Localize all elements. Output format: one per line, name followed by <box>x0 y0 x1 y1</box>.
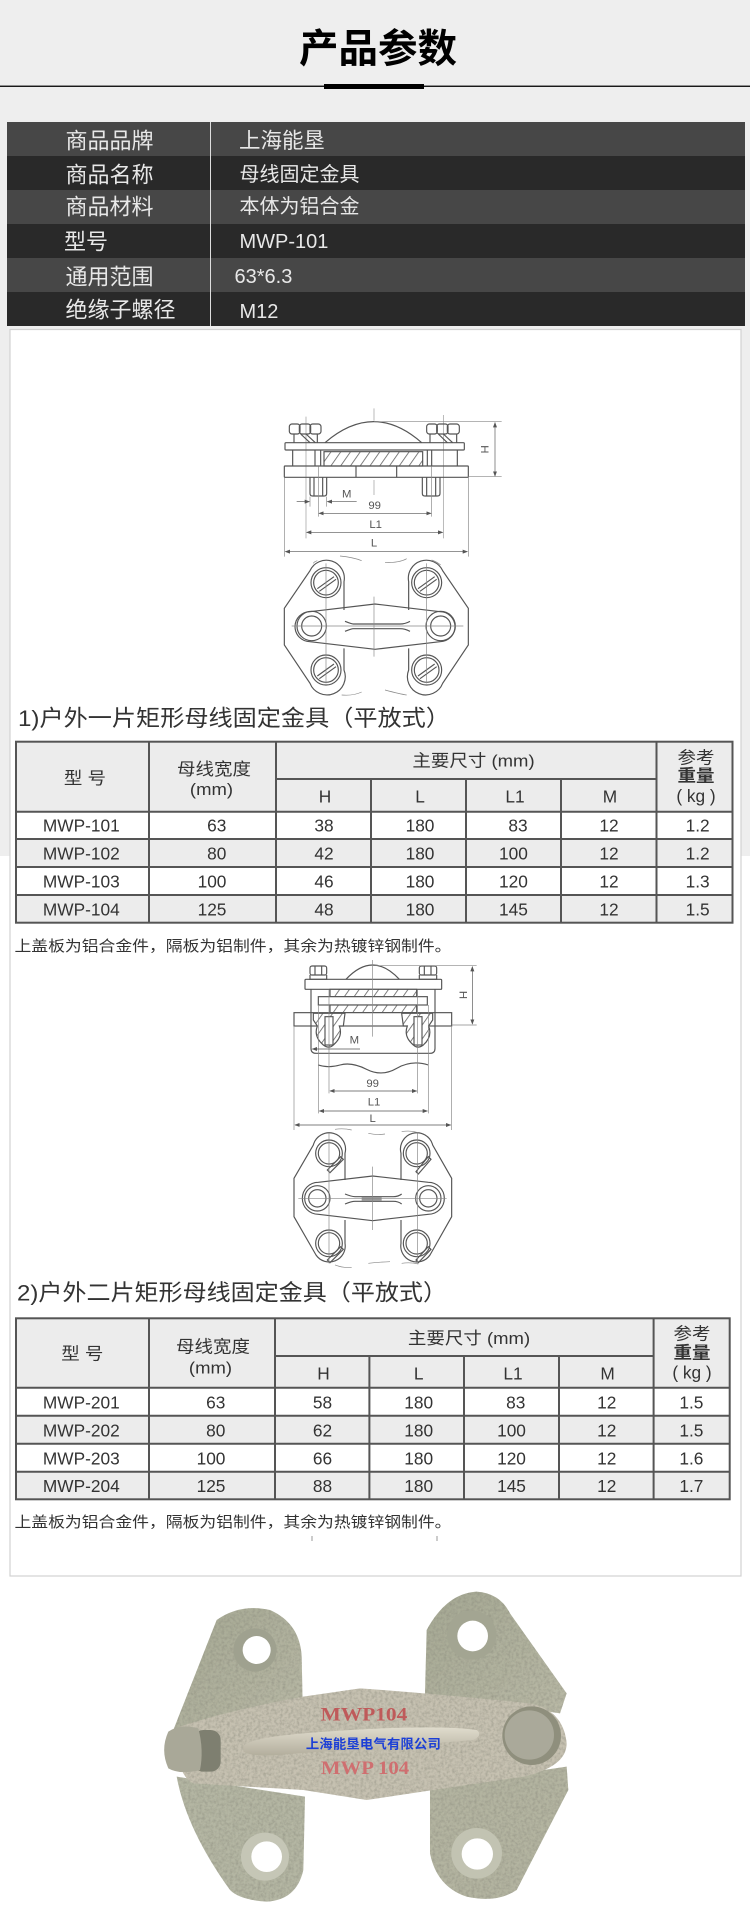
diagram: type 2 fitting: 99 <box>366 1078 379 1090</box>
table: type 2 sizes: 1.5 <box>679 1420 703 1440</box>
table: type 1 sizes: 母线宽度 <box>177 760 251 779</box>
table: type 1 sizes: 12 <box>599 872 619 892</box>
diagram: type 1 fitting <box>284 408 502 695</box>
table: type 2 sizes: 88 <box>313 1476 332 1496</box>
parameter table: 商品名称 <box>66 162 154 188</box>
table: type 1 sizes <box>16 742 732 923</box>
photo: MWP-104 fitting: MWP 104 <box>321 1758 409 1779</box>
table: type 1 sizes: MWP-102 <box>43 843 120 863</box>
table: type 2 sizes: 主要尺寸 (mm) <box>408 1329 530 1348</box>
parameter table: 型号 <box>64 230 108 254</box>
parameter table: 63*6.3 <box>234 266 292 288</box>
table: type 1 sizes: 46 <box>314 872 334 892</box>
diagram: type 2 fitting <box>294 960 477 1268</box>
table: type 1 sizes: 48 <box>314 899 334 919</box>
page background <box>0 0 750 856</box>
table: type 2 sizes: 63 <box>206 1392 225 1412</box>
table: type 1 sizes: 1.2 <box>686 816 710 836</box>
table: type 2 sizes: 100 <box>497 1420 526 1440</box>
diagram: type 1 fitting: L <box>371 537 377 549</box>
table: type 1 sizes: 180 <box>406 899 434 919</box>
parameter table: 通用范围 <box>66 264 154 290</box>
table: type 1 sizes: MWP-101 <box>43 816 120 836</box>
table: type 1 sizes: 42 <box>314 843 334 863</box>
watermark: 上海能垦电气有限公司 <box>306 1735 441 1751</box>
table: type 1 sizes: 100 <box>499 843 528 863</box>
table: type 2 sizes: 180 <box>404 1476 433 1496</box>
table: type 2 sizes: 58 <box>313 1392 332 1412</box>
table: type 2 sizes: 型 号 <box>61 1344 103 1364</box>
table: type 2 sizes: 180 <box>404 1392 433 1412</box>
diagram: type 2 fitting: L1 <box>368 1097 380 1109</box>
table: type 1 sizes: 主要尺寸 (mm) <box>412 751 535 770</box>
parameter table: 母线固定金具 <box>240 163 360 186</box>
diagram: type 1 fitting: H <box>478 445 490 453</box>
table: type 1 sizes: 38 <box>314 816 334 836</box>
table: type 1 sizes: 1.3 <box>686 872 710 892</box>
table: type 1 sizes: L <box>415 787 425 807</box>
table: type 2 sizes: L1 <box>503 1363 523 1383</box>
table: type 2 sizes: 62 <box>313 1420 332 1440</box>
photo: MWP-104 fitting: MWP104 <box>321 1704 407 1725</box>
table: type 2 sizes: 180 <box>404 1448 433 1468</box>
table: type 1 sizes: ( kg ) <box>676 786 716 806</box>
table: type 2 sizes: (mm) <box>189 1358 232 1377</box>
panel: specifications <box>10 330 741 1576</box>
diagram: type 1 fitting: M <box>342 488 351 500</box>
table: type 2 sizes: 1.5 <box>679 1392 703 1412</box>
table: type 1 sizes: 145 <box>499 899 528 919</box>
table: type 1 sizes: 180 <box>406 872 434 892</box>
table: type 1 sizes: 125 <box>198 899 226 919</box>
table: type 1 sizes: 83 <box>508 816 528 836</box>
table: type 1 sizes: (mm) <box>190 780 233 799</box>
table: type 2 sizes: 1.6 <box>679 1448 703 1468</box>
table: type 1 sizes: MWP-103 <box>43 872 120 892</box>
heading: section 1: 1)户外一片矩形母线固定金具（平放式） <box>18 706 450 731</box>
diagram: type 2 fitting: H <box>456 991 468 999</box>
table: type 2 sizes: L <box>414 1363 424 1383</box>
parameter table: M12 <box>240 301 278 323</box>
table: type 2 sizes: 145 <box>497 1476 526 1496</box>
diagram: type 2 fitting: M <box>350 1035 359 1047</box>
table: type 2 sizes: 125 <box>197 1476 225 1496</box>
table: type 2 sizes: MWP-204 <box>43 1476 120 1496</box>
table: type 1 sizes: 180 <box>406 843 434 863</box>
table: type 1 sizes: 180 <box>406 816 434 836</box>
table: type 2 sizes: 参考 <box>674 1324 710 1344</box>
table: type 2 sizes: 83 <box>506 1392 525 1412</box>
table: type 1 sizes: 1.2 <box>686 843 710 863</box>
table: type 2 sizes: 80 <box>206 1420 225 1440</box>
note: type 2: 上盖板为铝合金件，隔板为铝制件，其余为热镀锌钢制件。 <box>14 1513 452 1531</box>
table: type 1 sizes: MWP-104 <box>43 899 120 919</box>
parameter table: 本体为铝合金 <box>240 195 360 218</box>
table: type 1 sizes: L1 <box>505 787 525 807</box>
table: type 2 sizes: 1.7 <box>679 1476 703 1496</box>
parameter table: 商品材料 <box>66 194 154 220</box>
table: type 1 sizes: 重量 <box>678 766 715 786</box>
title divider <box>0 84 750 89</box>
table: type 2 sizes: MWP-202 <box>43 1420 120 1440</box>
diagram: type 2 fitting: L <box>370 1113 376 1125</box>
title: 产品参数 <box>299 28 457 72</box>
table: type 2 sizes: MWP-203 <box>43 1448 120 1468</box>
table: type 1 sizes: M <box>603 787 617 807</box>
table: type 2 sizes: 重量 <box>674 1343 711 1362</box>
note: type 1: 上盖板为铝合金件，隔板为铝制件，其余为热镀锌钢制件。 <box>14 937 452 955</box>
table: type 2 sizes: 12 <box>597 1476 616 1496</box>
table: type 2 sizes: MWP-201 <box>43 1392 120 1412</box>
table: type 1 sizes: 12 <box>599 816 619 836</box>
table: type 2 sizes: 12 <box>597 1448 616 1468</box>
table: type 2 sizes: ( kg ) <box>672 1363 712 1383</box>
table: type 2 sizes: 180 <box>404 1420 433 1440</box>
table: type 1 sizes: 120 <box>499 872 528 892</box>
table: type 1 sizes: 12 <box>599 843 619 863</box>
parameter table <box>7 122 745 326</box>
table: type 2 sizes <box>16 1318 730 1499</box>
table: type 2 sizes: 66 <box>313 1448 332 1468</box>
table: type 2 sizes: 12 <box>597 1420 616 1440</box>
table: type 2 sizes: M <box>600 1363 615 1383</box>
table: type 2 sizes: 120 <box>497 1448 526 1468</box>
parameter table: MWP-101 <box>240 231 328 253</box>
table: type 2 sizes: 12 <box>597 1392 616 1412</box>
table: type 1 sizes: H <box>319 787 331 807</box>
table: type 1 sizes: 80 <box>207 843 226 863</box>
diagram: type 1 fitting: L1 <box>369 519 382 531</box>
table: type 1 sizes: 1.5 <box>686 899 710 919</box>
table: type 2 sizes: 100 <box>197 1448 225 1468</box>
parameter table: 上海能垦 <box>239 129 325 153</box>
diagram: type 1 fitting: 99 <box>368 500 381 512</box>
table: type 1 sizes: 100 <box>198 872 226 892</box>
parameter table: 绝缘子螺径 <box>66 298 176 322</box>
table: type 2 sizes: H <box>317 1363 330 1383</box>
table: type 1 sizes: 参考 <box>678 748 714 767</box>
parameter table: 商品品牌 <box>66 128 154 154</box>
photo: MWP-104 fitting <box>164 1592 568 1902</box>
heading: section 2: 2)户外二片矩形母线固定金具（平放式） <box>17 1280 447 1305</box>
table: type 1 sizes: 型 号 <box>64 769 106 788</box>
table: type 1 sizes: 63 <box>207 816 226 836</box>
table: type 2 sizes: 母线宽度 <box>176 1337 250 1357</box>
table: type 1 sizes: 12 <box>599 899 619 919</box>
